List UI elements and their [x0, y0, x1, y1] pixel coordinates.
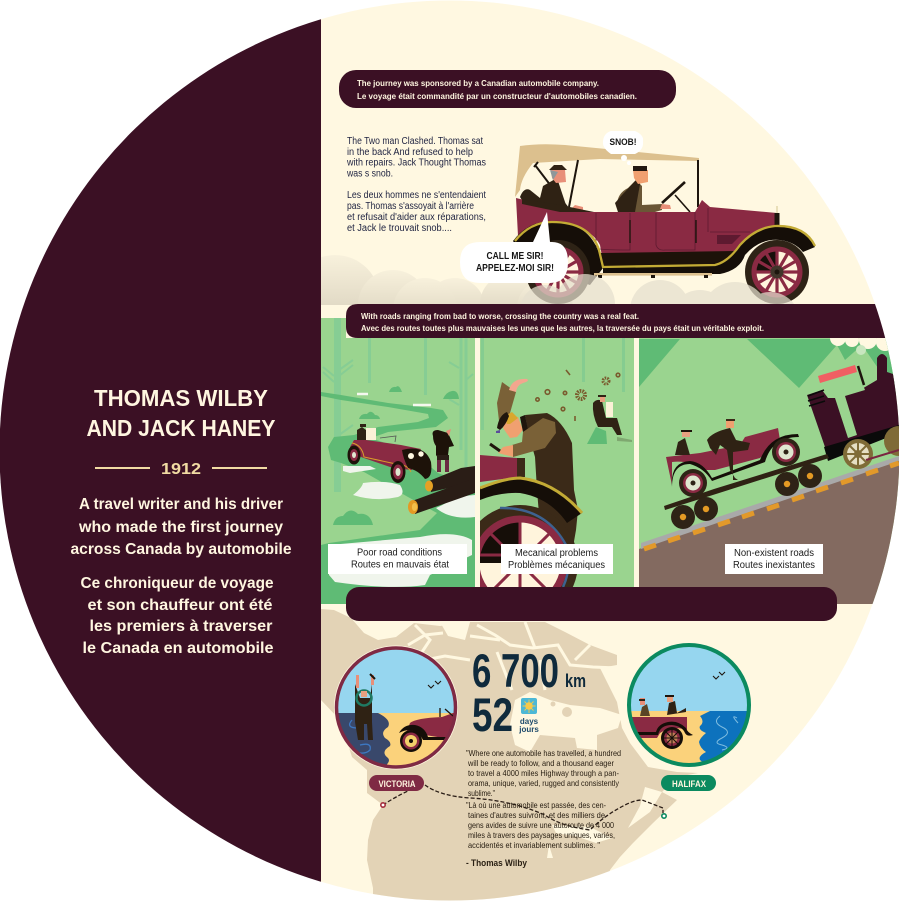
description: les premiers à traverser [90, 618, 272, 635]
story text: with repairs. Jack Thought Thomas [346, 158, 486, 168]
standing man [433, 429, 454, 472]
wheel and fender [480, 476, 583, 587]
locomotive [664, 354, 899, 510]
bushes [333, 386, 459, 525]
halifax medallion [625, 640, 755, 771]
title [87, 390, 276, 436]
speech bubble: call me sir [460, 212, 568, 283]
description: le Canada en automobile [82, 640, 274, 657]
quote [466, 748, 621, 869]
victoria label: VICTORIA [378, 779, 416, 790]
caption: non-existent roads: Non-existent roads [734, 548, 814, 559]
description [70, 496, 292, 657]
fallen logs [408, 466, 475, 514]
panel: poor road conditions [321, 318, 475, 604]
caption: poor road conditions: Routes en mauvais état [351, 560, 449, 570]
victoria label [369, 775, 424, 791]
road banner: Avec des routes toutes plus mauvaises les unes que les autres, la traversée du pays était un véritable exploit. [361, 323, 764, 333]
quote: to travel a 4000 miles Highway through a pan- [468, 768, 619, 778]
wheels [526, 240, 590, 304]
caption: non-existent roads [725, 544, 823, 574]
driver Jack [615, 166, 690, 212]
story text [346, 136, 486, 234]
empty bottom banner [346, 587, 837, 621]
small car [348, 424, 431, 483]
car on flatcar [666, 419, 800, 497]
puddles [329, 394, 475, 587]
main car illustration [513, 144, 815, 304]
story text: Les deux hommes ne s'entendaient [347, 190, 486, 201]
story text: was s snob. [346, 168, 393, 180]
panel: non-existent roads [639, 330, 899, 604]
page background disc [321, 0, 899, 901]
quote: will be ready to follow, and a thousand eager [467, 758, 614, 768]
quote: sublime." [468, 788, 495, 798]
sponsor banner [339, 70, 676, 108]
story text: et refusait d'aider aux réparations, [347, 212, 486, 223]
engine hood [480, 455, 517, 482]
quote: miles à travers des paysages uniques, variés, [468, 830, 615, 840]
flying parts [536, 370, 620, 421]
car body [516, 198, 776, 253]
caption: mechanical problems: Mecanical problems [515, 548, 598, 559]
passenger [675, 438, 690, 455]
quote: gens avides de suivre une autoroute de 4 000 [468, 820, 614, 830]
speech bubble: call me sir: APPELEZ-MOI SIR! [476, 263, 554, 274]
year divider: 1912 [161, 461, 201, 478]
description: who made the first journey [78, 519, 283, 536]
passenger Thomas [520, 165, 583, 212]
story text: pas. Thomas s'assoyait à l'arrière [347, 201, 474, 212]
hudson bay and lakes [510, 692, 662, 858]
quote: orama, unique, varied, rugged and consistently [468, 778, 620, 788]
quote: accidentés et invariablement sublimes. " [468, 840, 600, 850]
reader on stone [587, 395, 632, 444]
flatcar wheels [671, 505, 695, 529]
speech bubble: snob: SNOB! [610, 137, 636, 148]
story text: et Jack le trouvait snob.... [347, 223, 452, 234]
distance statistic: km [565, 671, 586, 691]
map of Canada [321, 609, 698, 901]
icon: sun [521, 698, 537, 714]
caption: mechanical problems: Problèmes mécaniques [508, 560, 605, 571]
route endpoints [381, 803, 666, 818]
story text: The Two man Clashed. Thomas sat [347, 136, 483, 147]
distance statistic: 6 700 [472, 644, 559, 697]
sponsor banner: Le voyage était commandité par un constructeur d'automobiles canadien. [357, 91, 637, 101]
description: Ce chroniqueur de voyage [80, 575, 274, 592]
speech bubble: snob [603, 131, 643, 165]
ground and rail [639, 459, 899, 604]
days statistic: days [520, 717, 539, 726]
caption: mechanical problems [501, 544, 613, 574]
canopy [515, 144, 699, 197]
road banner: With roads ranging from bad to worse, crossing the country was a real feat. [361, 311, 639, 321]
panel: mechanical problems [480, 338, 634, 587]
left title panel [0, 0, 321, 901]
story text: in the back And refused to help [347, 147, 473, 158]
chassis and fenders [600, 251, 734, 266]
mechanic [489, 378, 578, 542]
victoria medallion [330, 640, 460, 775]
foreground dust [531, 274, 794, 304]
forest trees [323, 318, 473, 493]
title: THOMAS WILBY [94, 385, 268, 411]
halifax label [661, 775, 716, 791]
winding road [321, 392, 475, 604]
sponsor banner: The journey was sponsored by a Canadian automobile company. [357, 78, 599, 88]
route line [383, 785, 663, 830]
halifax label: HALIFAX [672, 779, 707, 790]
dust clouds [321, 258, 531, 305]
title: AND JACK HANEY [86, 415, 276, 441]
days statistic: jours [518, 725, 539, 734]
quote: "Là où une automobile est passée, des cen- [466, 800, 606, 810]
days statistic: 52 [472, 688, 513, 741]
quote: "Where one automobile has travelled, a hundred [466, 748, 621, 758]
caption: poor road conditions [328, 544, 467, 574]
arctic channels [408, 622, 617, 690]
description: A travel writer and his driver [79, 496, 283, 513]
road banner [346, 304, 899, 338]
quote: taines d'autres suivront, et des milliers de [468, 810, 605, 820]
caption: poor road conditions: Poor road conditions [357, 548, 442, 558]
speech bubble: call me sir: CALL ME SIR! [486, 251, 544, 262]
climbing driver [707, 428, 750, 480]
quote: - Thomas Wilby [466, 858, 528, 869]
description: across Canada by automobile [70, 541, 292, 558]
steam [830, 338, 888, 351]
caption: non-existent roads: Routes inexistantes [733, 560, 815, 571]
description: et son chauffeur ont été [88, 597, 273, 614]
